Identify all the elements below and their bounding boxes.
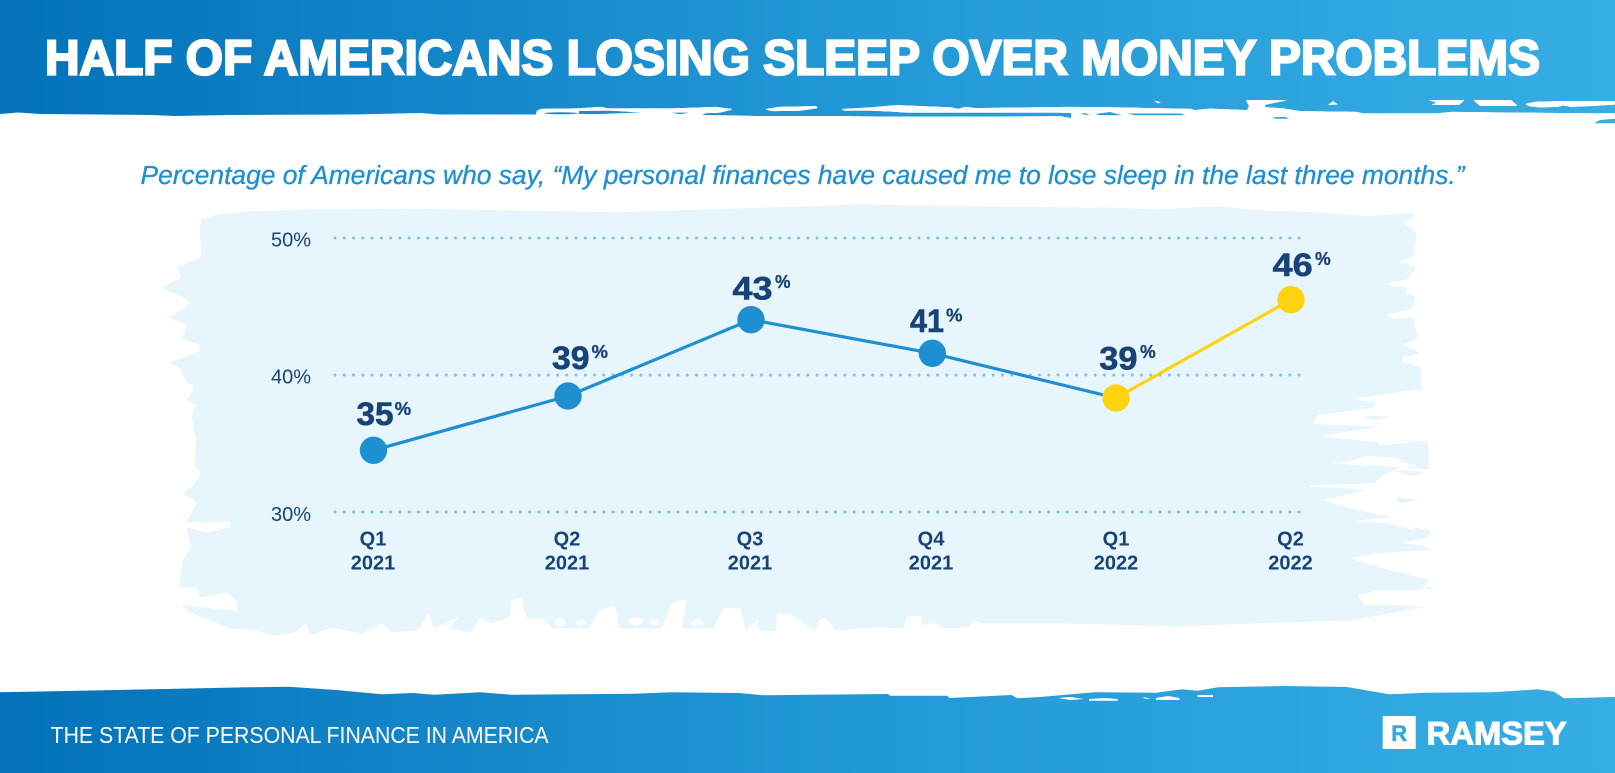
y axis labels: 30% xyxy=(271,504,311,526)
value labels: 39 xyxy=(552,340,590,376)
footer text: THE STATE OF PERSONAL FINANCE IN AMERICA xyxy=(51,722,549,748)
title: HALF OF AMERICANS LOSING SLEEP OVER MONEY PROBLEMS xyxy=(45,32,1540,86)
header banner xyxy=(0,0,1615,125)
x axis labels: Q4 xyxy=(918,529,945,551)
y axis labels: 40% xyxy=(271,366,311,388)
x axis labels: Q2 xyxy=(554,529,580,551)
yellow data line xyxy=(1116,300,1291,398)
value labels: 43 xyxy=(732,270,772,306)
panel: chart background brush xyxy=(162,205,1445,635)
value labels: % xyxy=(1315,249,1331,269)
x axis labels xyxy=(351,529,1313,574)
x axis labels: Q1 xyxy=(1103,529,1129,551)
value labels: 41 xyxy=(910,303,944,339)
x axis labels: 2021 xyxy=(909,552,953,574)
value labels: 39 xyxy=(1099,340,1138,376)
y axis labels xyxy=(271,230,311,526)
x axis labels: 2022 xyxy=(1268,552,1313,574)
value labels: % xyxy=(592,342,608,362)
value labels: % xyxy=(946,306,962,326)
value labels: % xyxy=(775,272,790,292)
blue data points xyxy=(360,306,946,464)
value labels: 35 xyxy=(356,396,394,432)
x axis labels: 2021 xyxy=(351,552,395,574)
x axis labels: 2022 xyxy=(1094,552,1138,574)
subtitle: Percentage of Americans who say, “My personal finances have caused me to lose sleep in the last three months.” xyxy=(140,162,1466,190)
value labels: % xyxy=(1140,342,1156,362)
x axis labels: 2021 xyxy=(545,552,589,574)
x axis labels: Q3 xyxy=(737,529,763,551)
blue data line xyxy=(374,320,1116,450)
footer banner xyxy=(0,686,1615,773)
x axis labels: Q1 xyxy=(360,529,386,551)
gridlines xyxy=(335,238,1302,512)
value labels: % xyxy=(395,399,411,419)
x axis labels: Q2 xyxy=(1277,529,1304,551)
yellow data points xyxy=(1102,286,1305,412)
line chart xyxy=(271,230,1331,574)
value labels xyxy=(356,247,1331,432)
x axis labels: 2021 xyxy=(728,552,772,574)
logo wordmark: RAMSEY xyxy=(1427,715,1567,751)
y axis labels: 50% xyxy=(271,230,311,252)
logo R mark: R xyxy=(1391,721,1407,746)
logo: Ramsey xyxy=(1383,715,1567,751)
logo square xyxy=(1383,716,1416,749)
value labels: 46 xyxy=(1273,247,1313,283)
